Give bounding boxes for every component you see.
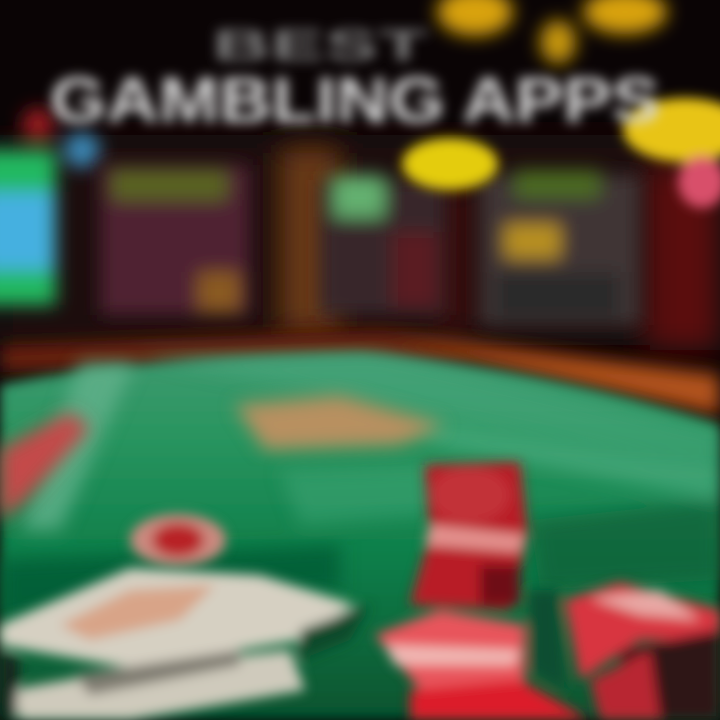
red markers left — [0, 412, 90, 522]
table markings — [0, 352, 720, 620]
title: BEST — [212, 21, 428, 70]
red chip stacks — [375, 462, 720, 720]
playing cards — [0, 568, 370, 720]
icon: yellow lamps — [402, 98, 720, 208]
table rail — [0, 330, 720, 420]
betting area orange — [235, 395, 445, 450]
green felt table — [0, 352, 720, 720]
panel: left green and blue screen — [0, 108, 100, 305]
title: GAMBLING APPS — [50, 64, 660, 136]
panel: game screen left — [100, 165, 250, 315]
panel: game screen right — [480, 170, 640, 325]
icon: golden decoration top — [437, 0, 667, 64]
red chip small — [130, 514, 226, 566]
panel: game screen centre — [320, 175, 445, 315]
back wall — [0, 135, 720, 350]
title — [50, 21, 660, 136]
